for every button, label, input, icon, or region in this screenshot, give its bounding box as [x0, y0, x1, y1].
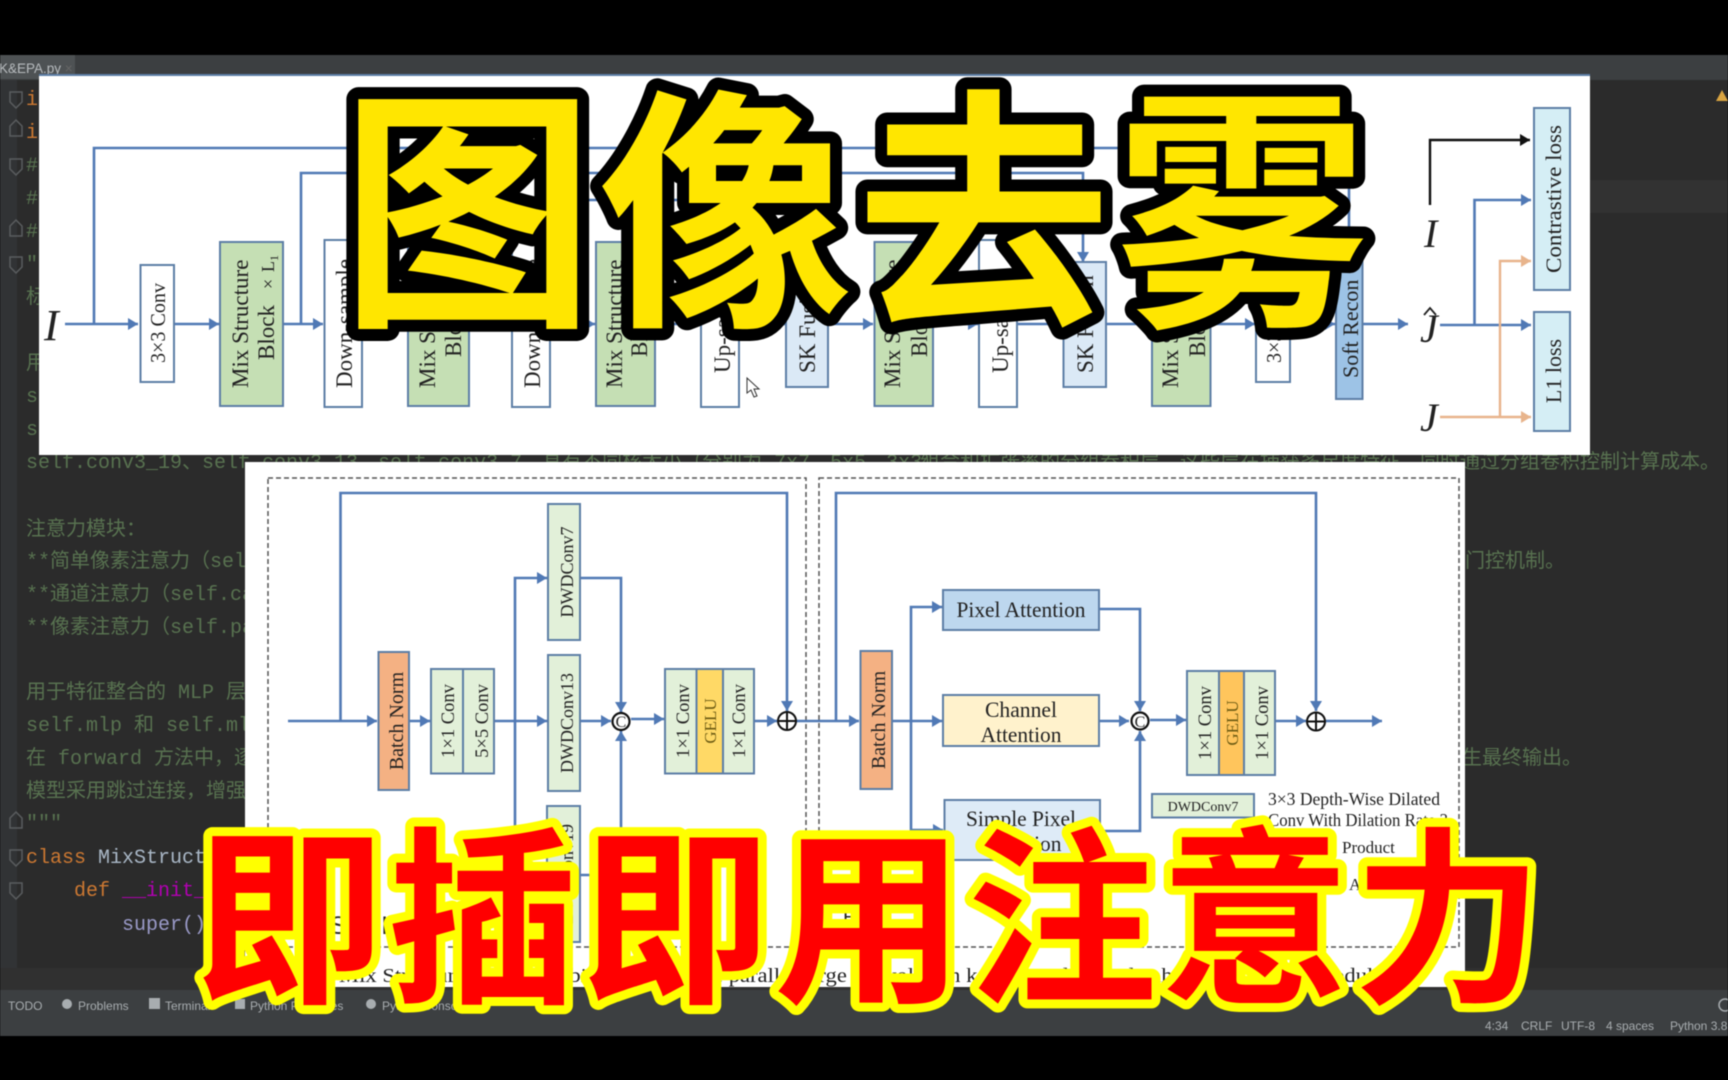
box: mix structure block 2: Mix Structure — [415, 260, 440, 388]
sublabels: EPA — [843, 907, 882, 929]
code text: s — [26, 386, 38, 409]
dashed group frames — [268, 478, 1459, 947]
code text: # — [26, 155, 38, 178]
code text: **简单像素注意力（self.sa） — [26, 549, 314, 574]
add symbol right — [1307, 712, 1325, 730]
box: SK fusion 2 — [1064, 262, 1106, 387]
code text: self.conv3_19、self.conv3_13、self.conv3_7，具有不同核大小（分别为 7x7、5x5、3x3）， — [26, 450, 952, 475]
IDE tool bar: Python Console — [382, 999, 467, 1013]
IDE status bar: CRLF — [1521, 1019, 1552, 1033]
code text: 用于特征整合的 MLP 层 — [26, 680, 246, 705]
concat symbol right: C — [1135, 714, 1145, 731]
box: mix structure block 5: Block — [1185, 302, 1210, 357]
box: mix structure block 5 — [1152, 242, 1210, 406]
box: conv GELU conv right: GELU — [1223, 700, 1242, 746]
box: DWDConv13: DWDConv13 — [557, 673, 577, 773]
output labels: J — [1420, 306, 1440, 351]
box: mix structure block 1 — [220, 242, 283, 406]
box: mix structure block 2: Block — [441, 302, 466, 357]
box: simple pixel attention — [944, 800, 1100, 860]
code text: 用 — [26, 353, 46, 376]
box: down-sample 1: Down-sample — [332, 259, 357, 388]
box: 3x3 conv: 3×3 Conv — [146, 283, 170, 363]
panel: mix structure block detail — [245, 462, 1465, 987]
box: 3x3 conv — [140, 265, 174, 382]
box: pixel attention: Pixel Attention — [956, 597, 1086, 622]
box: pixel attention — [943, 590, 1099, 630]
code text: # — [26, 221, 38, 244]
legend: Add — [1349, 875, 1379, 894]
code text: 模型采用跳过连接，增强 — [26, 779, 246, 804]
box: channel attention: Channel — [985, 697, 1057, 722]
subtitle: 即插即用注意力: 即插即用注意力 — [195, 817, 1546, 1029]
IDE status bar: 4:34 — [1485, 1019, 1509, 1033]
code text: 组合和扩张率的分组卷积层，这些层在捕获多尺度特征，同时通过分组卷积控制计算成本。 — [920, 450, 1720, 475]
legend: Product — [1342, 838, 1395, 857]
box: batch norm right: Batch Norm — [868, 670, 890, 769]
box: DWDConv19 — [547, 806, 580, 942]
code text: 标 — [26, 285, 46, 310]
box: SK fusion 1: SK Fusion — [795, 275, 820, 373]
box: mix structure block 1: L — [258, 261, 278, 272]
IDE tool bar: Python Packages — [250, 999, 343, 1013]
box: contrastive loss — [1534, 108, 1570, 290]
box: simple pixel attention: Attention — [980, 831, 1062, 856]
box: batch norm left: Batch Norm — [386, 671, 408, 770]
code gutter fold markers — [10, 92, 22, 899]
box: mix structure block 1: 1 — [267, 255, 281, 261]
input label I: I — [43, 301, 61, 350]
box: simple pixel attention: Simple Pixel — [966, 806, 1076, 831]
box: mix structure block 4: Block — [907, 302, 932, 357]
box: channel attention — [943, 695, 1099, 747]
legend — [1152, 789, 1448, 894]
code text: # — [26, 188, 38, 211]
box: conv GELU conv left: GELU — [701, 698, 720, 744]
box: SK fusion 2: SK Fusion — [1073, 275, 1098, 373]
code text: def __init__ — [74, 880, 219, 903]
sublabels — [330, 907, 882, 940]
warning icon — [1716, 90, 1728, 101]
box: up-sample 2: Up-sample — [988, 272, 1013, 373]
flow arrows — [288, 493, 1382, 875]
title: 图像去雾: 图像去雾 — [340, 76, 1372, 361]
output labels — [1420, 211, 1440, 440]
code text: 在 forward 方法中，逐步 — [26, 746, 274, 771]
code text: self.mlp 和 self.mlp2 — [26, 713, 274, 738]
IDE status bar — [1485, 1019, 1728, 1033]
box: down-sample 1 — [324, 240, 362, 407]
code text: import torch.nn as nn — [26, 122, 278, 145]
box: mix structure block 2 — [408, 242, 469, 406]
box: mix structure block 3: Mix Structure — [602, 260, 627, 388]
box: mix structure block 3 — [596, 242, 655, 406]
box: up-sample 1 — [701, 240, 739, 407]
legend: 3×3 Depth-Wise Dilated — [1268, 789, 1440, 809]
box: up-sample 1: Up-sample — [710, 272, 735, 373]
sublabels: SPCK — [330, 912, 398, 940]
legend: DWDConv7 — [1168, 800, 1238, 815]
IDE tool bar — [8, 998, 1728, 1013]
box: batch norm left — [378, 652, 409, 790]
box: L1 loss: L1 loss — [1541, 339, 1566, 403]
box: down-sample 2: Down-sample — [520, 259, 545, 388]
figure caption: Mix Structure Block combines multi-scale parallel large convolution kernel module and enhanced attention module. — [339, 965, 1389, 987]
code text: import torch — [26, 89, 170, 112]
output labels: I — [1423, 211, 1439, 256]
box: 1x1 conv and 5x5 conv: 1×1 Conv — [439, 683, 459, 758]
box: final 3x3 conv: 3×3 Conv — [1262, 283, 1286, 363]
editor tab: K&EPA.py × — [0, 61, 73, 76]
box: mix structure block 1: × — [258, 279, 278, 289]
box: DWDConv19: DWDConv19 — [557, 824, 577, 924]
code text: 注意力模块： — [26, 517, 146, 542]
output labels: J — [1420, 395, 1440, 440]
box: mix structure block 4 — [874, 242, 933, 406]
panel: top network diagram — [39, 74, 1590, 455]
code text — [26, 89, 1720, 937]
box: 1x1 conv and 5x5 conv: 5×5 Conv — [473, 683, 493, 758]
box: down-sample 2 — [512, 240, 550, 407]
skip connection arrows — [65, 148, 1408, 324]
box: up-sample 2 — [979, 240, 1017, 407]
loss arrows — [1430, 140, 1531, 417]
concat symbol left — [612, 713, 630, 731]
box: mix structure block 5: Mix Structure — [1158, 260, 1183, 388]
code text: """ — [26, 813, 62, 836]
concat symbol left: C — [616, 714, 626, 731]
box: mix structure block 1: Block — [254, 305, 279, 360]
box: soft reconstruction — [1336, 249, 1363, 399]
IDE status bar: Python 3.8 — [1670, 1019, 1728, 1033]
icon: mouse cursor — [747, 378, 759, 397]
IDE status bar: 4 spaces — [1606, 1019, 1654, 1033]
box: conv GELU conv left — [665, 669, 754, 774]
box: 1x1 conv and 5x5 conv — [431, 669, 494, 774]
code text: **通道注意力（self.ca） — [26, 582, 274, 607]
box: conv GELU conv left: 1×1 Conv — [674, 683, 694, 758]
code text: super() — [122, 914, 206, 937]
box: DWDConv7: DWDConv7 — [557, 526, 577, 618]
box: SK fusion 1 — [786, 262, 828, 387]
code text: class MixStructureBlock — [26, 847, 302, 870]
box: final 3x3 conv — [1256, 265, 1290, 382]
box: L1 loss — [1534, 312, 1570, 431]
IDE tool bar: Terminal — [165, 999, 210, 1013]
IDE tool bar: Problems — [78, 999, 129, 1013]
box: conv GELU conv right — [1187, 671, 1275, 775]
box: channel attention: Attention — [980, 722, 1062, 747]
box: contrastive loss: Contrastive loss — [1541, 125, 1566, 273]
box: mix structure block 1: Mix Structure — [228, 260, 253, 388]
code text: 门控机制。 — [1465, 549, 1565, 574]
box: conv GELU conv right: 1×1 Conv — [1196, 685, 1216, 760]
box: DWDConv13 — [548, 655, 580, 791]
box: conv GELU conv right: 1×1 Conv — [1253, 685, 1273, 760]
add symbol left — [778, 712, 796, 730]
code text: 产生最终输出。 — [1442, 746, 1582, 771]
box: conv GELU conv left: 1×1 Conv — [730, 683, 750, 758]
box: mix structure block 4: Mix Structure — [880, 260, 905, 388]
legend: Conv With Dilation Rate 3 — [1268, 810, 1448, 830]
box: batch norm right — [860, 651, 892, 789]
box: mix structure block 3: Block — [627, 302, 652, 357]
IDE status bar: UTF-8 — [1561, 1019, 1595, 1033]
concat symbol right — [1132, 712, 1148, 731]
code text: """ — [26, 254, 62, 277]
code text: **像素注意力（self.pa） — [26, 615, 274, 640]
box: soft reconstruction: Soft Recon — [1338, 280, 1363, 378]
box: DWDConv7 — [548, 504, 580, 640]
IDE tool bar: TODO — [8, 999, 42, 1013]
code text: s — [26, 419, 38, 442]
